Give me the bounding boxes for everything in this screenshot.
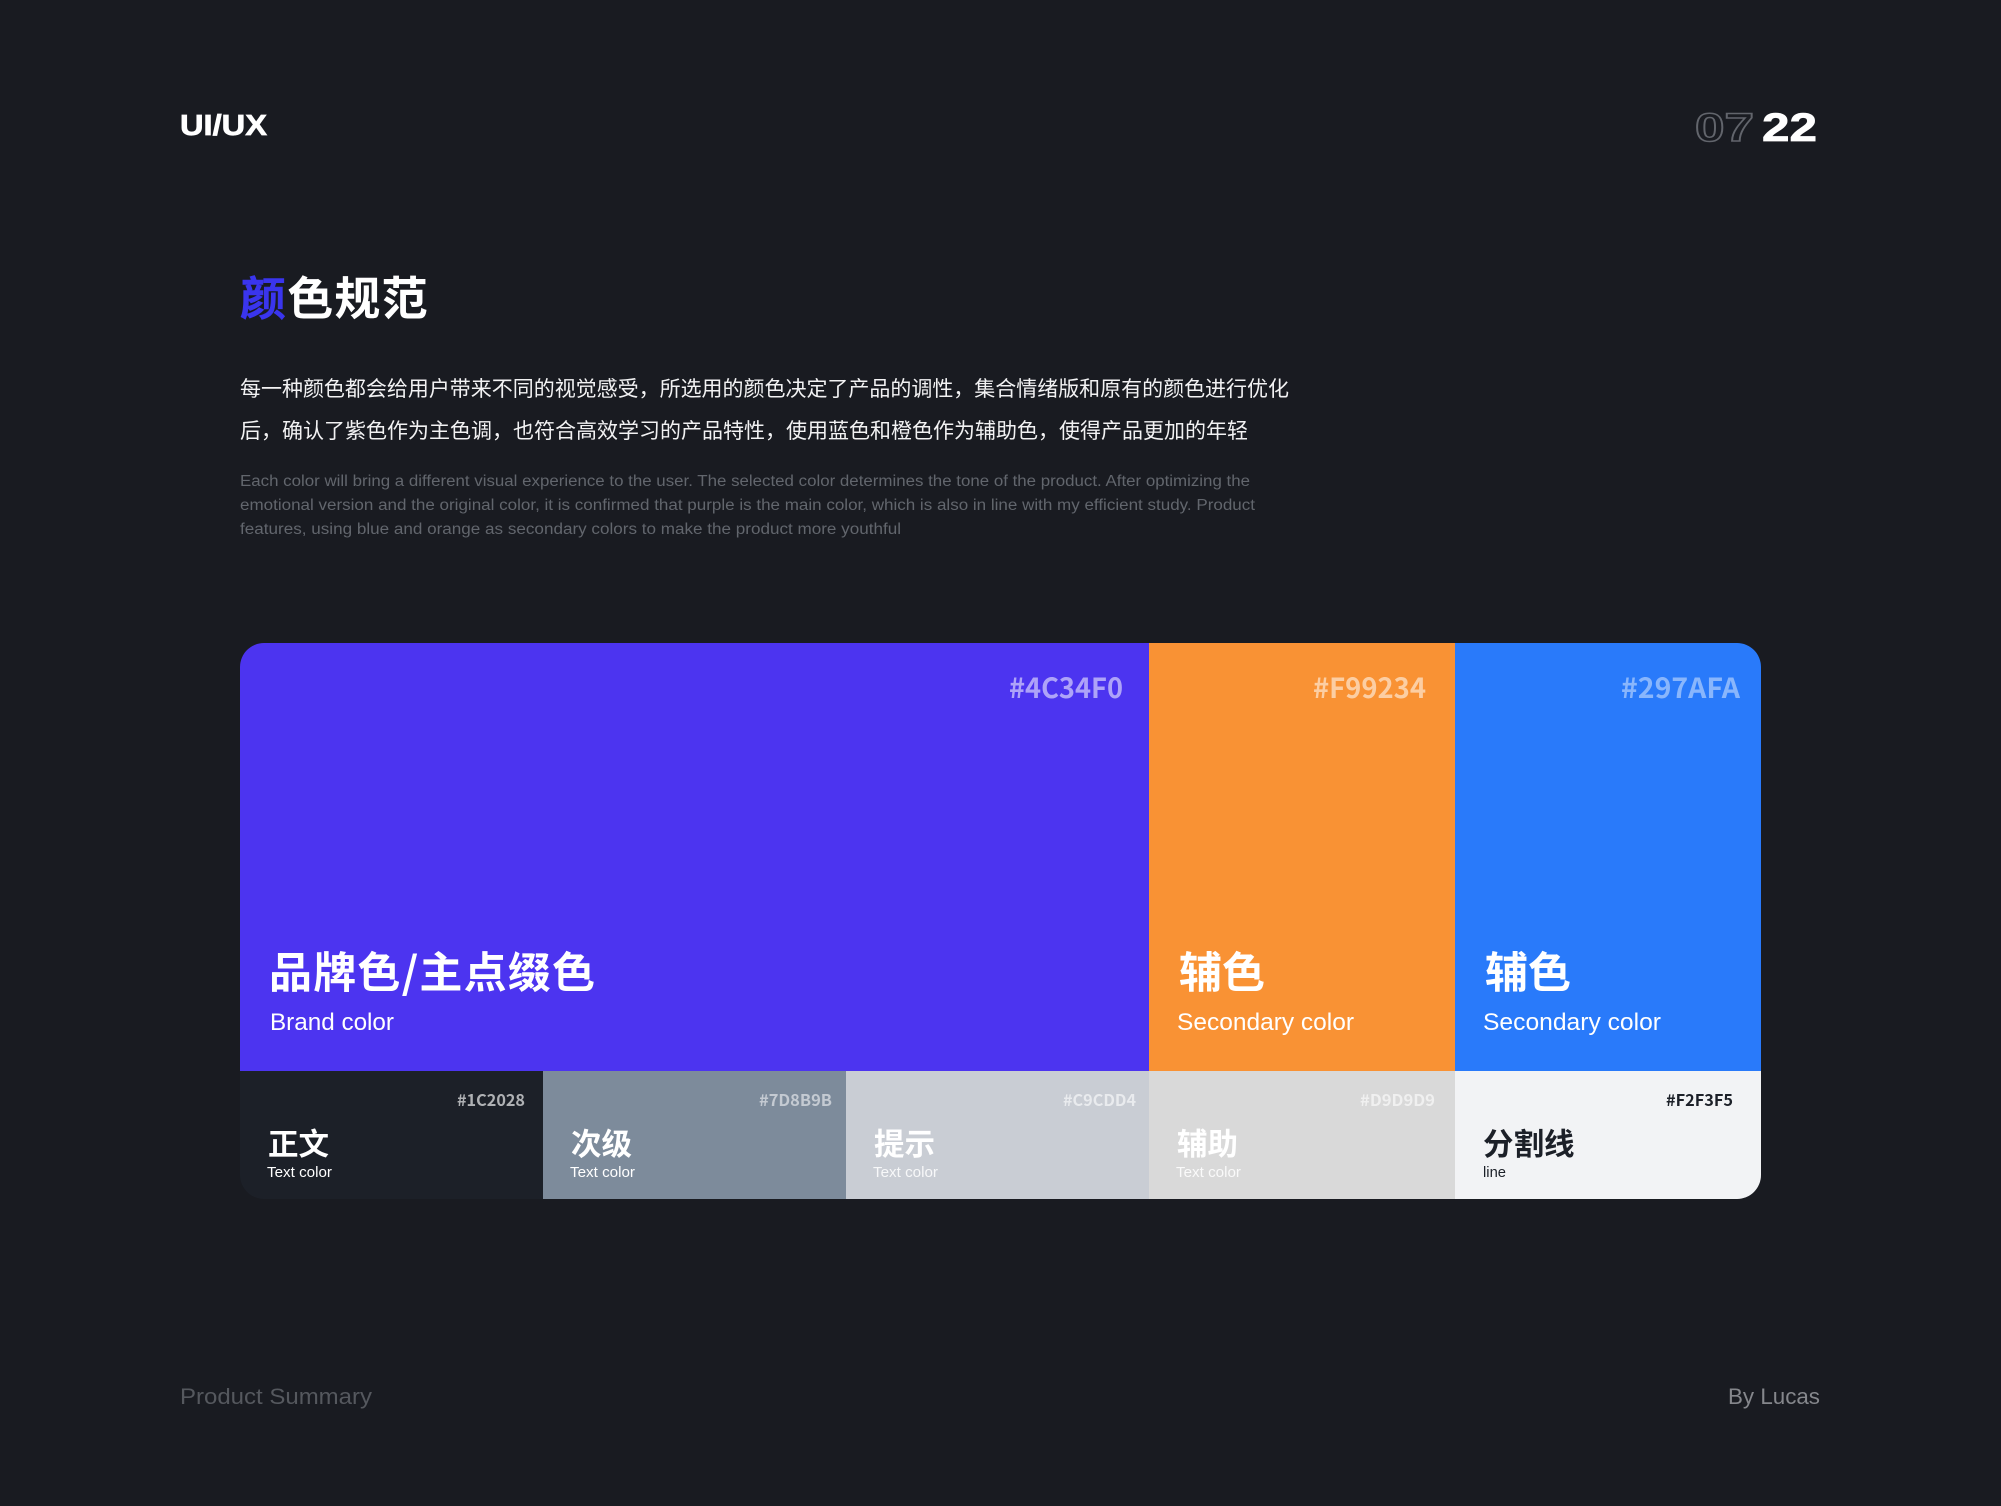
swatch: hint text color: 提示 xyxy=(874,1120,935,1164)
swatch: secondary orange: 辅色 xyxy=(1179,939,1265,1001)
outlined number 07: 07 xyxy=(1695,106,1754,150)
swatch: secondary blue xyxy=(1455,643,1761,1071)
solid number 22: 22 xyxy=(1762,106,1817,150)
swatch: auxiliary text color xyxy=(1149,1071,1455,1199)
Chinese description xyxy=(240,373,1289,445)
color palette panel xyxy=(240,643,1761,1199)
Chinese description: 后，确认了紫色作为主色调，也符合高效学习的产品特性，使用蓝色和橙色作为辅助色，使得产品更加的年轻 xyxy=(240,415,1248,445)
swatch: auxiliary text color: 辅助 xyxy=(1177,1120,1238,1164)
swatch: hint text color: #C9CDD4 xyxy=(1063,1087,1136,1111)
swatch: secondary text color: 次级 xyxy=(571,1120,632,1164)
swatch: body text color xyxy=(267,1094,524,1177)
swatch: brand color: 品牌色/主点缀色 xyxy=(269,939,595,1001)
swatch: auxiliary text color: Text color xyxy=(1176,1164,1241,1181)
swatch: secondary orange: Secondary color xyxy=(1177,1009,1354,1036)
swatch: divider line color: line xyxy=(1483,1164,1506,1181)
swatch: secondary blue: #297AFA xyxy=(1621,667,1741,707)
header label: UI/UX: UI/UX xyxy=(180,110,268,142)
page number xyxy=(1695,106,1817,150)
swatch: brand color: #4C34F0 xyxy=(1009,667,1123,707)
swatch: secondary orange xyxy=(1149,643,1455,1071)
swatch: divider line color xyxy=(1455,1071,1761,1199)
English description: emotional version and the original color, it is confirmed that purple is the main color, which is also in line with my efficient study. Product xyxy=(240,497,1256,514)
swatch: secondary text color xyxy=(543,1071,846,1199)
swatch: secondary orange: #F99234 xyxy=(1313,667,1426,707)
Chinese description: 每一种颜色都会给用户带来不同的视觉感受，所选用的颜色决定了产品的调性，集合情绪版和原有的颜色进行优化 xyxy=(240,373,1289,403)
swatch: secondary text color: Text color xyxy=(570,1164,635,1181)
title: 颜色规范 xyxy=(240,263,429,329)
English description xyxy=(240,473,1256,538)
swatch: secondary blue: Secondary color xyxy=(1483,1009,1661,1036)
swatch: body text color: #1C2028 xyxy=(457,1087,525,1111)
swatch: brand color xyxy=(240,643,1149,1071)
footer right: By Lucas: By Lucas xyxy=(1728,1384,1820,1409)
swatch: secondary text color: #7D8B9B xyxy=(759,1087,832,1111)
English description: features, using blue and orange as secondary colors to make the product more youthful xyxy=(240,521,901,538)
swatch: divider line color: 分割线 xyxy=(1483,1120,1574,1164)
swatch: hint text color: Text color xyxy=(873,1164,938,1181)
page canvas xyxy=(182,112,1820,1408)
swatch: brand color: Brand color xyxy=(270,1009,394,1036)
swatch: auxiliary text color: #D9D9D9 xyxy=(1360,1087,1435,1111)
swatch: body text color: Text color xyxy=(267,1164,332,1181)
swatch: body text color: 正文 xyxy=(268,1120,329,1164)
swatch: hint text color xyxy=(846,1071,1149,1199)
English description: Each color will bring a different visual experience to the user. The selected color determines the tone of the product. After optimizing the xyxy=(240,473,1250,490)
footer left: Product Summary: Product Summary xyxy=(180,1384,372,1409)
swatch: divider line color: #F2F3F5 xyxy=(1666,1087,1733,1111)
swatch: secondary blue: 辅色 xyxy=(1485,939,1571,1001)
